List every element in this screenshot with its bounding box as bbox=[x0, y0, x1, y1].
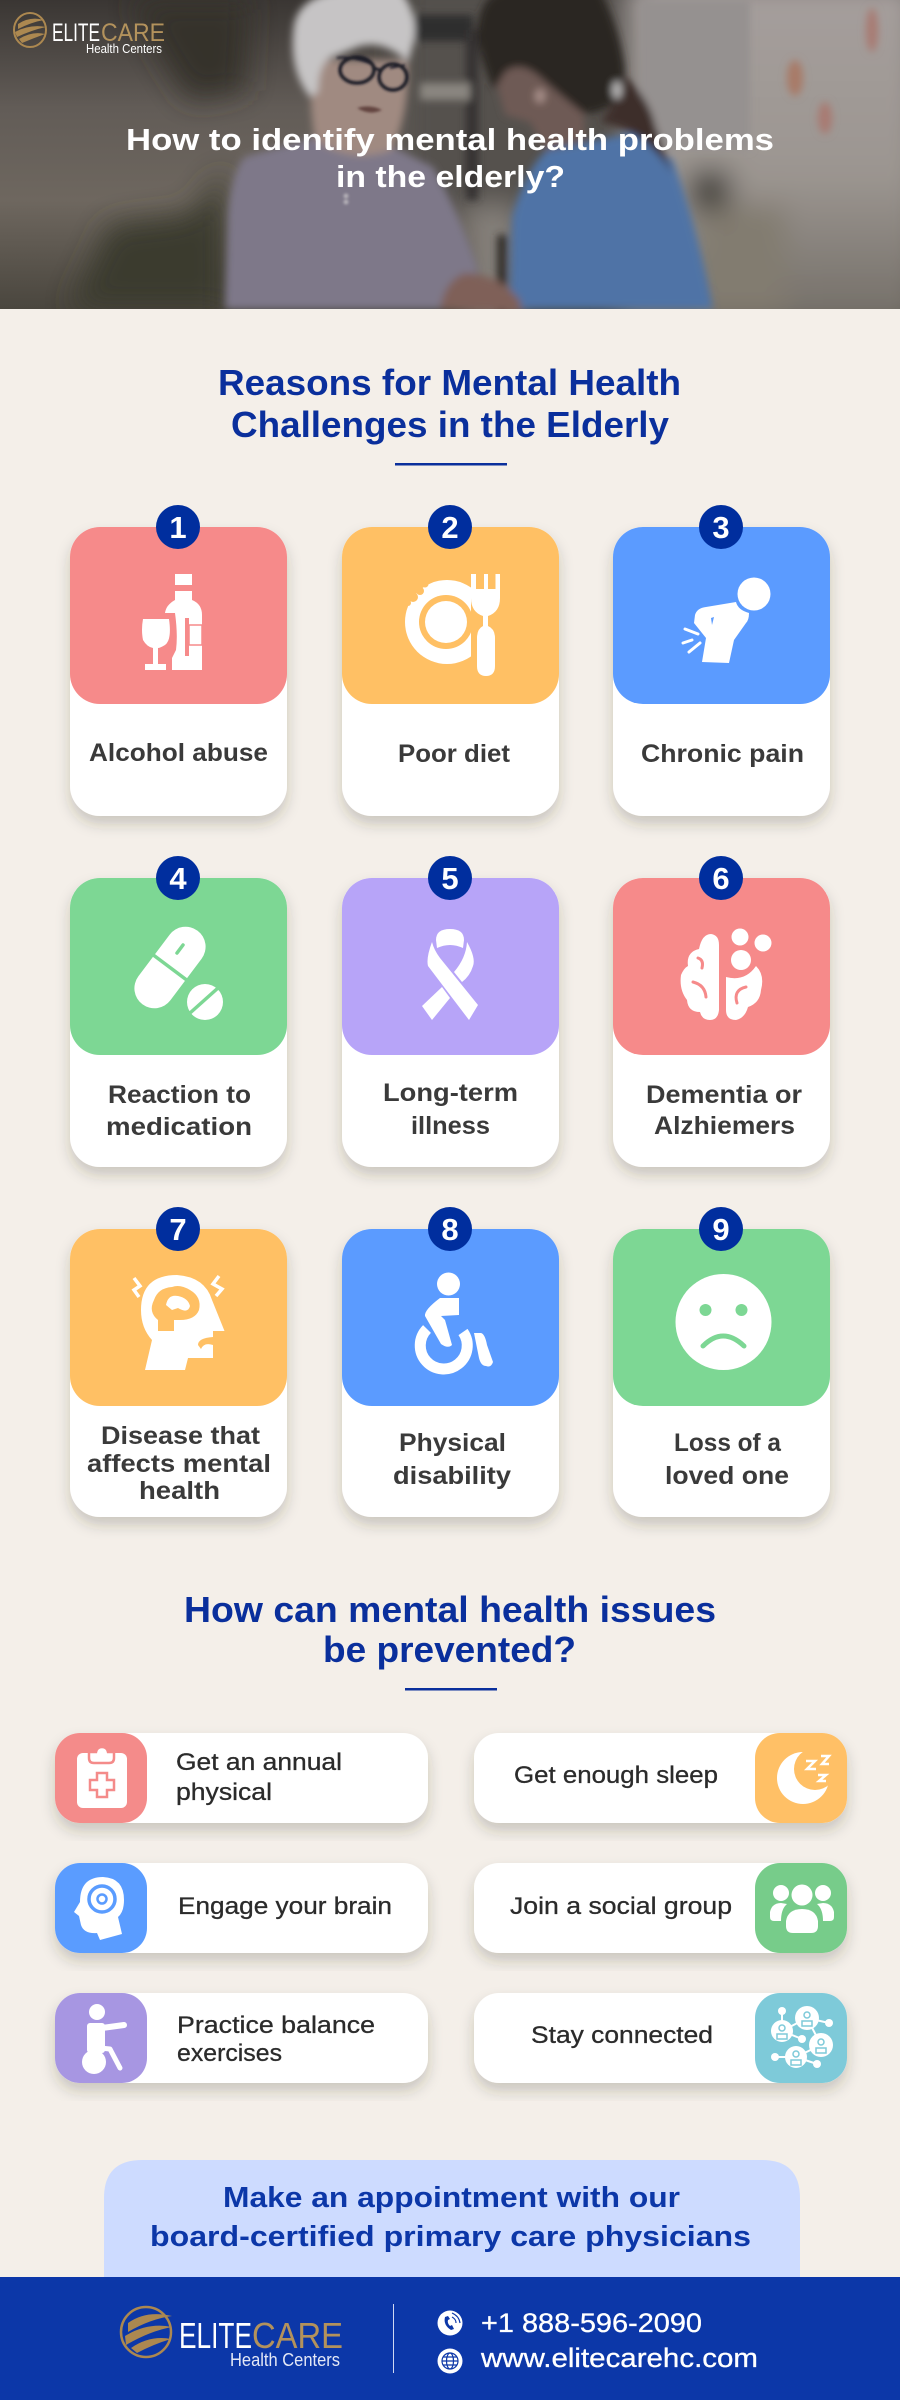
text: Engage your brain bbox=[178, 1893, 392, 1920]
text: exercises bbox=[177, 2040, 282, 2067]
text: Stay connected bbox=[531, 2022, 713, 2049]
badge 6 bbox=[699, 856, 743, 900]
badge 7: 7 bbox=[169, 1212, 187, 1247]
woman bbox=[225, 138, 477, 309]
label bbox=[665, 1429, 789, 1490]
logo: Elite Care footer: Health Centers bbox=[230, 2350, 340, 2370]
badge 8: 8 bbox=[441, 1212, 459, 1247]
icon: ribbon bbox=[422, 929, 478, 1020]
text: Get an annual bbox=[176, 1749, 342, 1776]
icon: pills bbox=[152, 945, 223, 1020]
icon: head with target bbox=[74, 1877, 124, 1940]
tip: engage your brain bbox=[55, 1863, 428, 1953]
label bbox=[393, 1429, 511, 1490]
logo: Elite Care footer: CARE bbox=[252, 2315, 343, 2356]
badge 2: 2 bbox=[441, 510, 459, 545]
icon: plate and fork bbox=[405, 574, 505, 680]
badge 7 bbox=[156, 1207, 200, 1251]
label: medication bbox=[106, 1113, 252, 1141]
text: Get enough sleep bbox=[514, 1762, 718, 1789]
badge 3 bbox=[699, 505, 743, 549]
heading: reasons: Reasons for Mental Health bbox=[218, 362, 681, 403]
label: Chronic pain bbox=[641, 740, 804, 768]
tip: social group bbox=[474, 1863, 847, 1953]
badge 9: 9 bbox=[712, 1212, 730, 1247]
text: Join a social group bbox=[510, 1893, 732, 1920]
badge 4: 4 bbox=[169, 861, 187, 896]
icon: knee pain bbox=[683, 578, 770, 663]
text: physical bbox=[176, 1779, 272, 1806]
badge 4 bbox=[156, 856, 200, 900]
phone number: +1 888-596-2090 bbox=[481, 2308, 702, 2338]
icon: brain bbox=[681, 928, 772, 1020]
logo: Elite Care footer: ELITE bbox=[179, 2315, 252, 2356]
call to action panel bbox=[104, 2160, 800, 2278]
icon: moon bbox=[777, 1748, 836, 1804]
heading: prevention bbox=[184, 1589, 716, 1690]
icon: phone bbox=[438, 2310, 462, 2336]
text: Practice balance bbox=[177, 2012, 375, 2039]
title: in the elderly? bbox=[336, 159, 565, 194]
card 3: chronic pain bbox=[613, 505, 830, 816]
label: Disease that bbox=[101, 1422, 261, 1450]
footer bbox=[0, 2277, 900, 2400]
badge 6: 6 bbox=[712, 861, 730, 896]
website: www.elitecarehc.com bbox=[480, 2343, 758, 2373]
label: affects mental bbox=[87, 1450, 271, 1478]
label: disability bbox=[393, 1462, 511, 1490]
label bbox=[106, 1081, 252, 1141]
label: loved one bbox=[665, 1462, 789, 1490]
badge 5: 5 bbox=[441, 861, 459, 896]
label: Loss of a bbox=[674, 1429, 782, 1457]
label: Alzhiemers bbox=[654, 1112, 795, 1140]
card 7: disease that affects mental health bbox=[70, 1207, 287, 1517]
logo: Elite Care top: ELITE bbox=[52, 19, 100, 47]
text bbox=[177, 2012, 375, 2067]
tip: enough sleep bbox=[474, 1733, 847, 1823]
heading: reasons: Challenges in the Elderly bbox=[231, 404, 669, 445]
label: Alcohol abuse bbox=[89, 739, 268, 767]
badge 3: 3 bbox=[712, 510, 730, 545]
badge 9 bbox=[699, 1207, 743, 1251]
icon: head with brain bbox=[134, 1275, 224, 1370]
text bbox=[176, 1749, 342, 1806]
title bbox=[126, 122, 774, 194]
label: Reaction to bbox=[108, 1081, 251, 1109]
badge 1: 1 bbox=[169, 510, 187, 545]
heading: prevention: be prevented? bbox=[323, 1629, 576, 1670]
icon: bottle and glass bbox=[142, 574, 202, 670]
badge 2 bbox=[428, 505, 472, 549]
call to action panel: Make an appointment with our bbox=[223, 2182, 680, 2214]
tip: stay connected bbox=[474, 1993, 847, 2083]
icon: wheelchair bbox=[420, 1272, 493, 1369]
divider bbox=[393, 2304, 394, 2373]
icon: clipboard bbox=[77, 1747, 127, 1808]
label: Long-term bbox=[383, 1079, 518, 1107]
card 9: loss of a loved one bbox=[613, 1207, 830, 1517]
label bbox=[383, 1079, 518, 1140]
badge 8 bbox=[428, 1207, 472, 1251]
label: Poor diet bbox=[398, 740, 511, 768]
label bbox=[87, 1422, 271, 1505]
logo: Elite Care footer bbox=[121, 2307, 343, 2370]
logo: Elite Care top: Health Centers bbox=[86, 41, 162, 56]
heading: prevention: How can mental health issues bbox=[184, 1589, 716, 1630]
card 2: poor diet bbox=[342, 505, 559, 816]
nurse bbox=[510, 133, 713, 309]
label: Physical bbox=[399, 1429, 506, 1457]
icon: globe bbox=[438, 2348, 462, 2374]
card 4: reaction to medication bbox=[70, 856, 287, 1167]
hero photo banner bbox=[0, 0, 900, 330]
heading: reasons bbox=[218, 362, 681, 466]
call to action panel: board-certified primary care physicians bbox=[150, 2221, 751, 2253]
tip: annual physical bbox=[55, 1733, 428, 1823]
label: Dementia or bbox=[646, 1081, 802, 1109]
card 6: dementia or alzhiemers bbox=[613, 856, 830, 1167]
card 5: long-term illness bbox=[342, 856, 559, 1167]
icon: sad face bbox=[676, 1274, 772, 1370]
icon: group of people bbox=[770, 1884, 834, 1933]
logo: Elite Care top: CARE bbox=[101, 19, 165, 47]
badge 1 bbox=[156, 505, 200, 549]
card 1: alcohol abuse bbox=[70, 505, 287, 816]
icon: network of people bbox=[771, 2006, 833, 2068]
label: illness bbox=[411, 1112, 490, 1140]
label bbox=[646, 1081, 802, 1140]
tip: balance exercises bbox=[55, 1993, 428, 2083]
label: health bbox=[139, 1477, 220, 1505]
icon: person on ball bbox=[82, 2004, 124, 2074]
title: How to identify mental health problems bbox=[126, 122, 774, 157]
logo: Elite Care top bbox=[14, 13, 165, 56]
badge 5 bbox=[428, 856, 472, 900]
card 8: physical disability bbox=[342, 1207, 559, 1517]
